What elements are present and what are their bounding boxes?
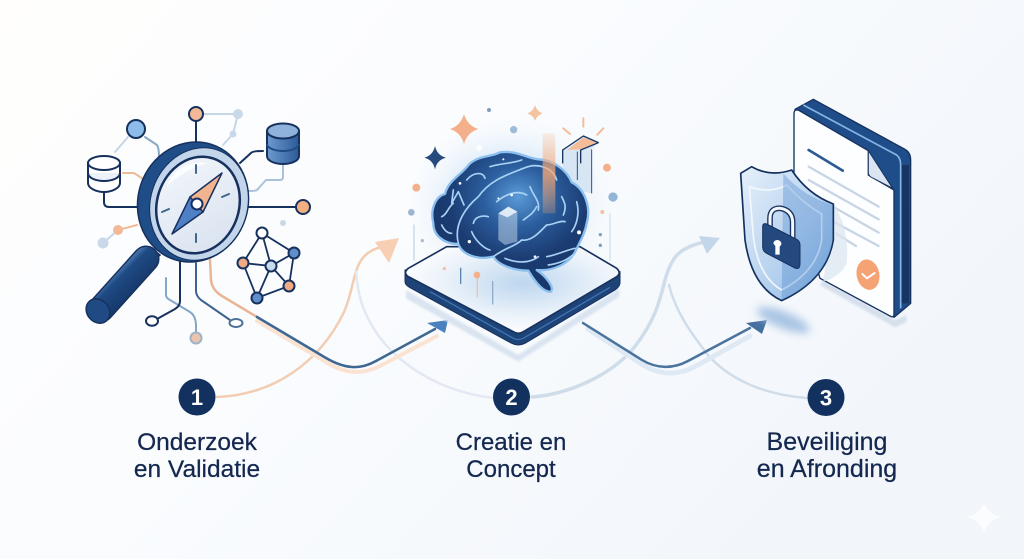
step 3: label: Beveiliging [767, 428, 887, 456]
arrow: flow 1 to 2 (light arcs) [217, 238, 494, 398]
node: top orange [189, 107, 203, 121]
dark circuit lines [104, 122, 297, 320]
platform base [405, 270, 620, 345]
icon: database right [267, 124, 299, 164]
step 3: label: en Afronding [757, 455, 897, 483]
glow [407, 117, 613, 297]
platform shadow [406, 288, 619, 362]
node: blue [127, 120, 145, 138]
node: lower left [146, 316, 158, 326]
step 2: number [493, 378, 530, 416]
page fold [868, 151, 893, 188]
node: light dots [98, 109, 286, 248]
brain [432, 152, 588, 292]
node: lower centre [190, 332, 202, 344]
shadow under floor [754, 302, 813, 338]
platform top [405, 247, 619, 333]
node: right orange [296, 200, 310, 214]
compass needle [172, 173, 222, 234]
step 2: label: Concept [466, 456, 556, 483]
icon: orange sparkle large [450, 114, 478, 144]
step 2: label: Creatie en [456, 429, 566, 456]
arrow: magnifier to platform [210, 260, 448, 372]
step 3: number [808, 379, 844, 416]
document shadow [820, 280, 907, 327]
arrow: flow 2 to 3 (light arcs) [532, 236, 807, 398]
shield glow on page [823, 203, 847, 282]
step 1: number [178, 378, 216, 416]
step 1: label: en Validatie [134, 456, 260, 483]
icon: brain on platform [405, 105, 620, 362]
icon: dark sparkle [424, 146, 446, 169]
brain folds [442, 160, 578, 265]
magnifier handle [81, 247, 160, 328]
document text lines [809, 150, 879, 246]
icon: magnifier with compass and data nodes [81, 107, 310, 344]
step 1: label: Onderzoek [137, 429, 258, 456]
glass column top right [563, 136, 598, 193]
document page [794, 110, 894, 317]
icon: document and shield [741, 99, 911, 338]
node: lower right [230, 319, 242, 327]
padlock [763, 208, 800, 268]
check badge [854, 257, 882, 292]
icon: network graph [238, 228, 300, 304]
icon: faint sparkle [968, 503, 1000, 533]
document back cover [795, 99, 911, 317]
particles [408, 108, 618, 278]
step 2: number: 2 [505, 385, 518, 410]
compass ticks [162, 165, 229, 242]
icon: database left [88, 156, 120, 192]
magnifier lens [122, 127, 264, 277]
arrow: platform to security [583, 320, 767, 373]
rays [563, 118, 603, 135]
step 1: number: 1 [191, 385, 203, 410]
light circuit lines [103, 114, 283, 332]
glowing bar on brain [498, 207, 517, 245]
shield [741, 167, 833, 301]
glowing orange column [543, 133, 555, 213]
step 3: number: 3 [820, 386, 832, 410]
icon: orange sparkle small [527, 105, 543, 121]
node: small orange [113, 225, 123, 235]
light rods [414, 213, 610, 304]
